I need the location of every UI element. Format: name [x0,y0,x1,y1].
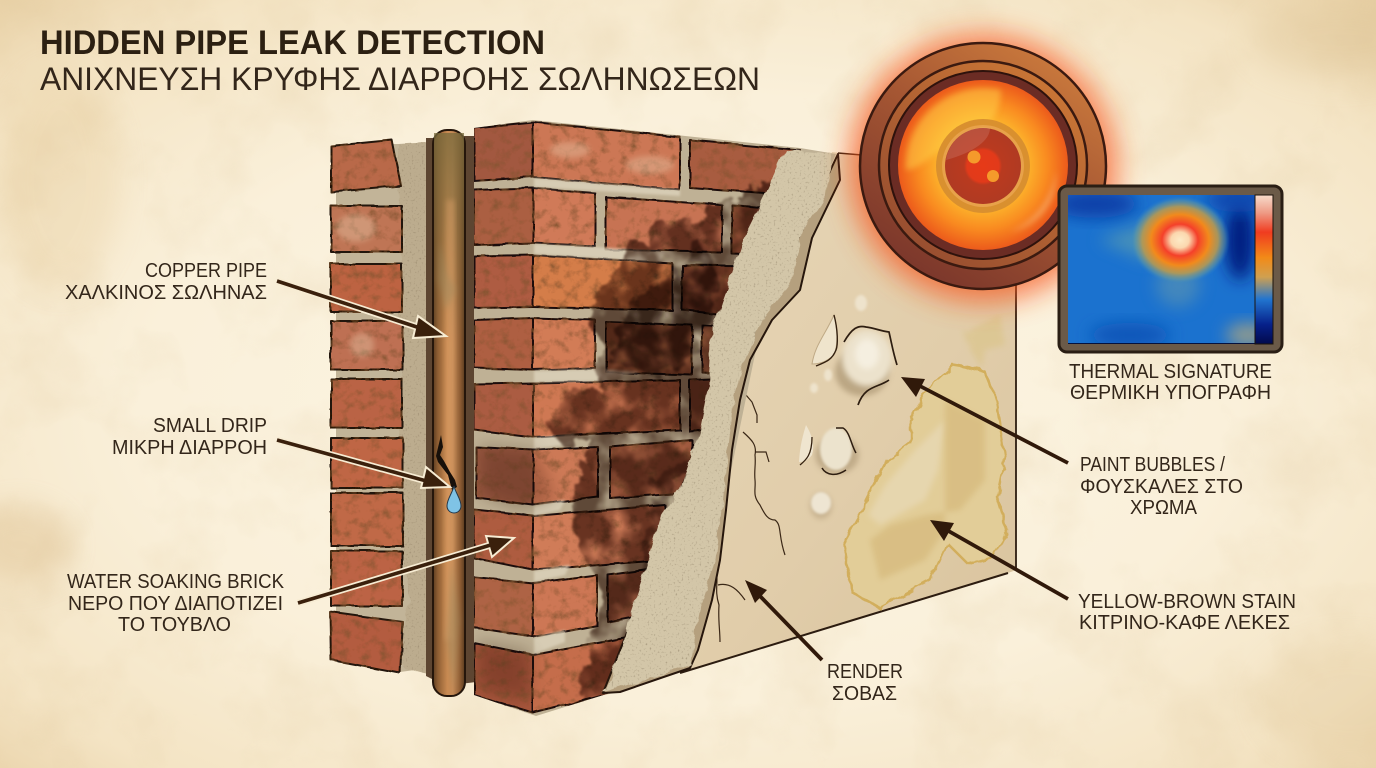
front wall bricks [474,122,800,713]
arrow: yellow-brown stain [930,520,1068,599]
label: thermal signature: THERMAL SIGNATURE [1069,361,1272,383]
label: water soaking brick: ΤΟ ΤΟΥΒΛΟ [118,614,231,636]
label: copper pipe: ΧΑΛΚΙΝΟΣ ΣΩΛΗΝΑΣ [65,282,267,304]
left wing bricks [330,140,403,673]
label: copper pipe [65,260,267,304]
label: small drip: SMALL DRIP [153,415,267,437]
shadow right of pipe [426,136,478,684]
left wing render strip [396,142,434,676]
right wing mortar base [474,120,836,716]
label: copper pipe: COPPER PIPE [145,260,267,282]
label: thermal signature [1069,361,1272,404]
title: HIDDEN PIPE LEAK DETECTION [40,24,545,62]
label: paint bubbles: PAINT BUBBLES / [1080,454,1225,476]
arrow: render [745,580,822,660]
label: water soaking brick [67,571,285,636]
label: yellow-brown stain: ΚΙΤΡΙΝΟ-ΚΑΦΕ ΛΕΚΕΣ [1079,612,1290,634]
label: paint bubbles [1080,454,1243,519]
label: paint bubbles: ΦΟΥΣΚΑΛΕΣ ΣΤΟ [1080,476,1243,498]
arrow: small drip [277,440,450,488]
label: yellow-brown stain [1078,591,1296,634]
title [40,24,760,97]
label: render: ΣΟΒΑΣ [832,683,897,705]
thermal camera lens [849,34,1117,302]
label: render: RENDER [827,661,903,683]
arrow: paint bubbles [901,377,1068,463]
tan underlayer [603,154,840,693]
label: small drip: ΜΙΚΡΗ ΔΙΑΡΡΟΗ [112,437,267,459]
label: thermal signature: ΘΕΡΜΙΚΗ ΥΠΟΓΡΑΦΗ [1070,382,1271,404]
label: paint bubbles: ΧΡΩΜΑ [1130,497,1198,519]
label: yellow-brown stain: YELLOW-BROWN STAIN [1078,591,1296,613]
paint bubbles [799,295,897,519]
yellow-brown stain [843,315,1007,608]
title: ΑΝΙΧΝΕΥΣΗ ΚΡΥΦΗΣ ΔΙΑΡΡΟΗΣ ΣΩΛΗΝΩΣΕΩΝ [40,61,760,97]
heat map [1068,195,1254,343]
exposed concrete layer [603,150,832,693]
render hairline cracks [716,395,785,642]
thermal image monitor [1053,186,1282,352]
icon: pipe crack and water drop [436,435,461,513]
label: water soaking brick: WATER SOAKING BRICK [67,571,285,593]
left wing mortar backing [336,144,430,672]
arrow: water soaking brick [298,536,514,603]
dark water stain [476,180,770,700]
label: render [827,661,903,705]
brick efflorescence patches [336,142,674,357]
arrow: copper pipe [277,281,446,338]
label: small drip [112,415,267,459]
label: water soaking brick: ΝΕΡΟ ΠΟΥ ΔΙΑΠΟΤΙΖΕΙ [68,593,283,615]
corner light mortar highlights [534,178,680,654]
panel: wall cross-section [330,120,1016,716]
render plaster surface [606,152,1016,695]
copper pipe [433,130,465,696]
